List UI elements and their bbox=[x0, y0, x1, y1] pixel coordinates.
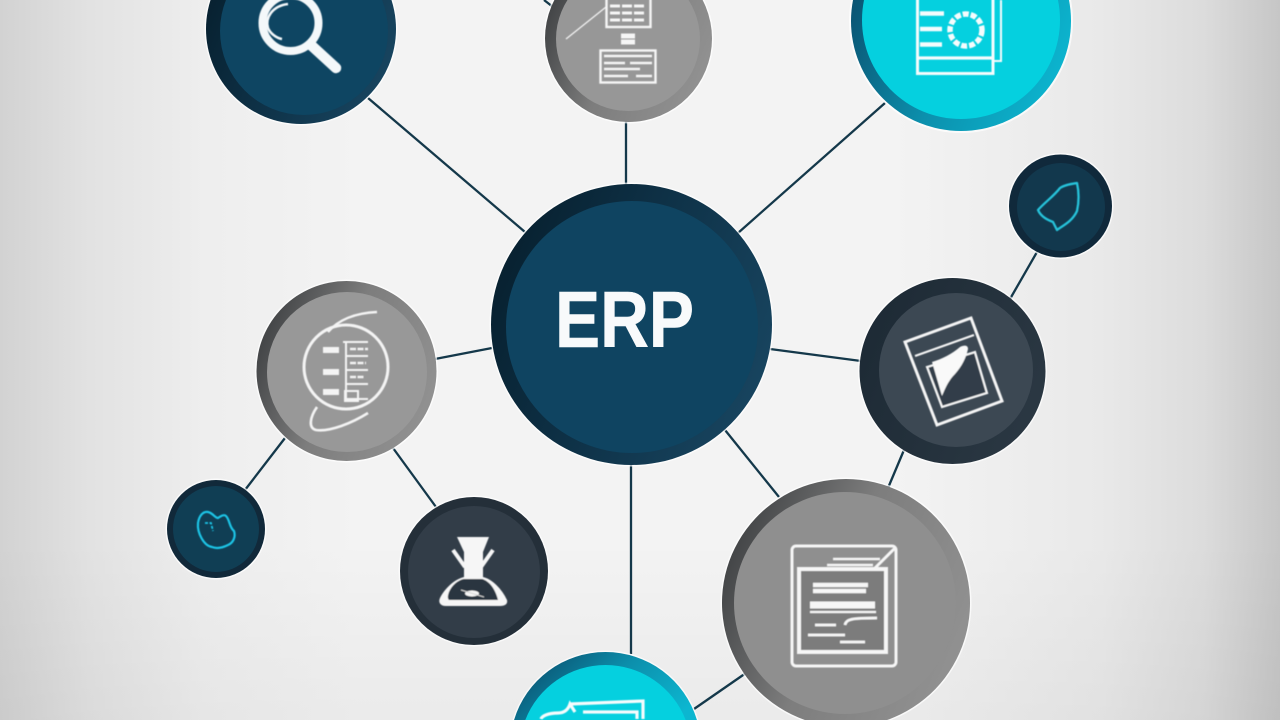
icon: document with folded corner bbox=[792, 546, 896, 666]
node: top gray bbox=[544, 0, 714, 124]
connector lines bbox=[245, 0, 1037, 709]
icon: folder and documents bbox=[541, 701, 643, 719]
connector: ERP to large gray bbox=[725, 430, 779, 497]
connector: bottom cyan to large gray bbox=[694, 673, 746, 709]
connector: ERP to slate node bbox=[770, 349, 861, 361]
connector: slate node to large gray bbox=[888, 450, 904, 488]
node: top cyan bbox=[849, 0, 1073, 133]
connector: top gray to ERP bbox=[625, 120, 627, 186]
icon: document with seal bbox=[917, 0, 1001, 74]
node: small blob bbox=[166, 478, 266, 580]
node: search bbox=[204, 0, 398, 126]
icon: magnifying glass bbox=[262, 0, 336, 68]
connector: gray left to small blob bbox=[245, 438, 285, 490]
node: gray left bbox=[255, 280, 438, 462]
node: slate right bbox=[858, 276, 1047, 466]
node: large gray bbox=[721, 477, 972, 720]
icon: blob outline bbox=[198, 512, 235, 548]
node: ERP hub bbox=[490, 182, 774, 466]
node: bottom cyan bbox=[512, 651, 698, 720]
connector: search to ERP bbox=[368, 98, 525, 232]
title: ERP: ERP bbox=[555, 275, 694, 364]
icon: tilted picture card bbox=[905, 318, 1002, 425]
node: flask bbox=[398, 496, 550, 646]
node: small rocket bbox=[1008, 153, 1114, 259]
connector: top gray off-canvas bbox=[544, 0, 553, 7]
connector: ERP to bottom cyan bbox=[630, 464, 632, 654]
connector: gray left to flask node bbox=[393, 448, 436, 507]
connector: ERP to gray left node bbox=[435, 348, 492, 359]
connector: small rocket to slate node bbox=[1010, 252, 1037, 299]
icon: rocket outline bbox=[1038, 183, 1078, 230]
icon: document in orbit bbox=[304, 312, 388, 430]
icon: flask bbox=[439, 537, 507, 606]
connector: top cyan to ERP bbox=[738, 103, 885, 233]
icon: linked documents bbox=[566, 0, 656, 82]
